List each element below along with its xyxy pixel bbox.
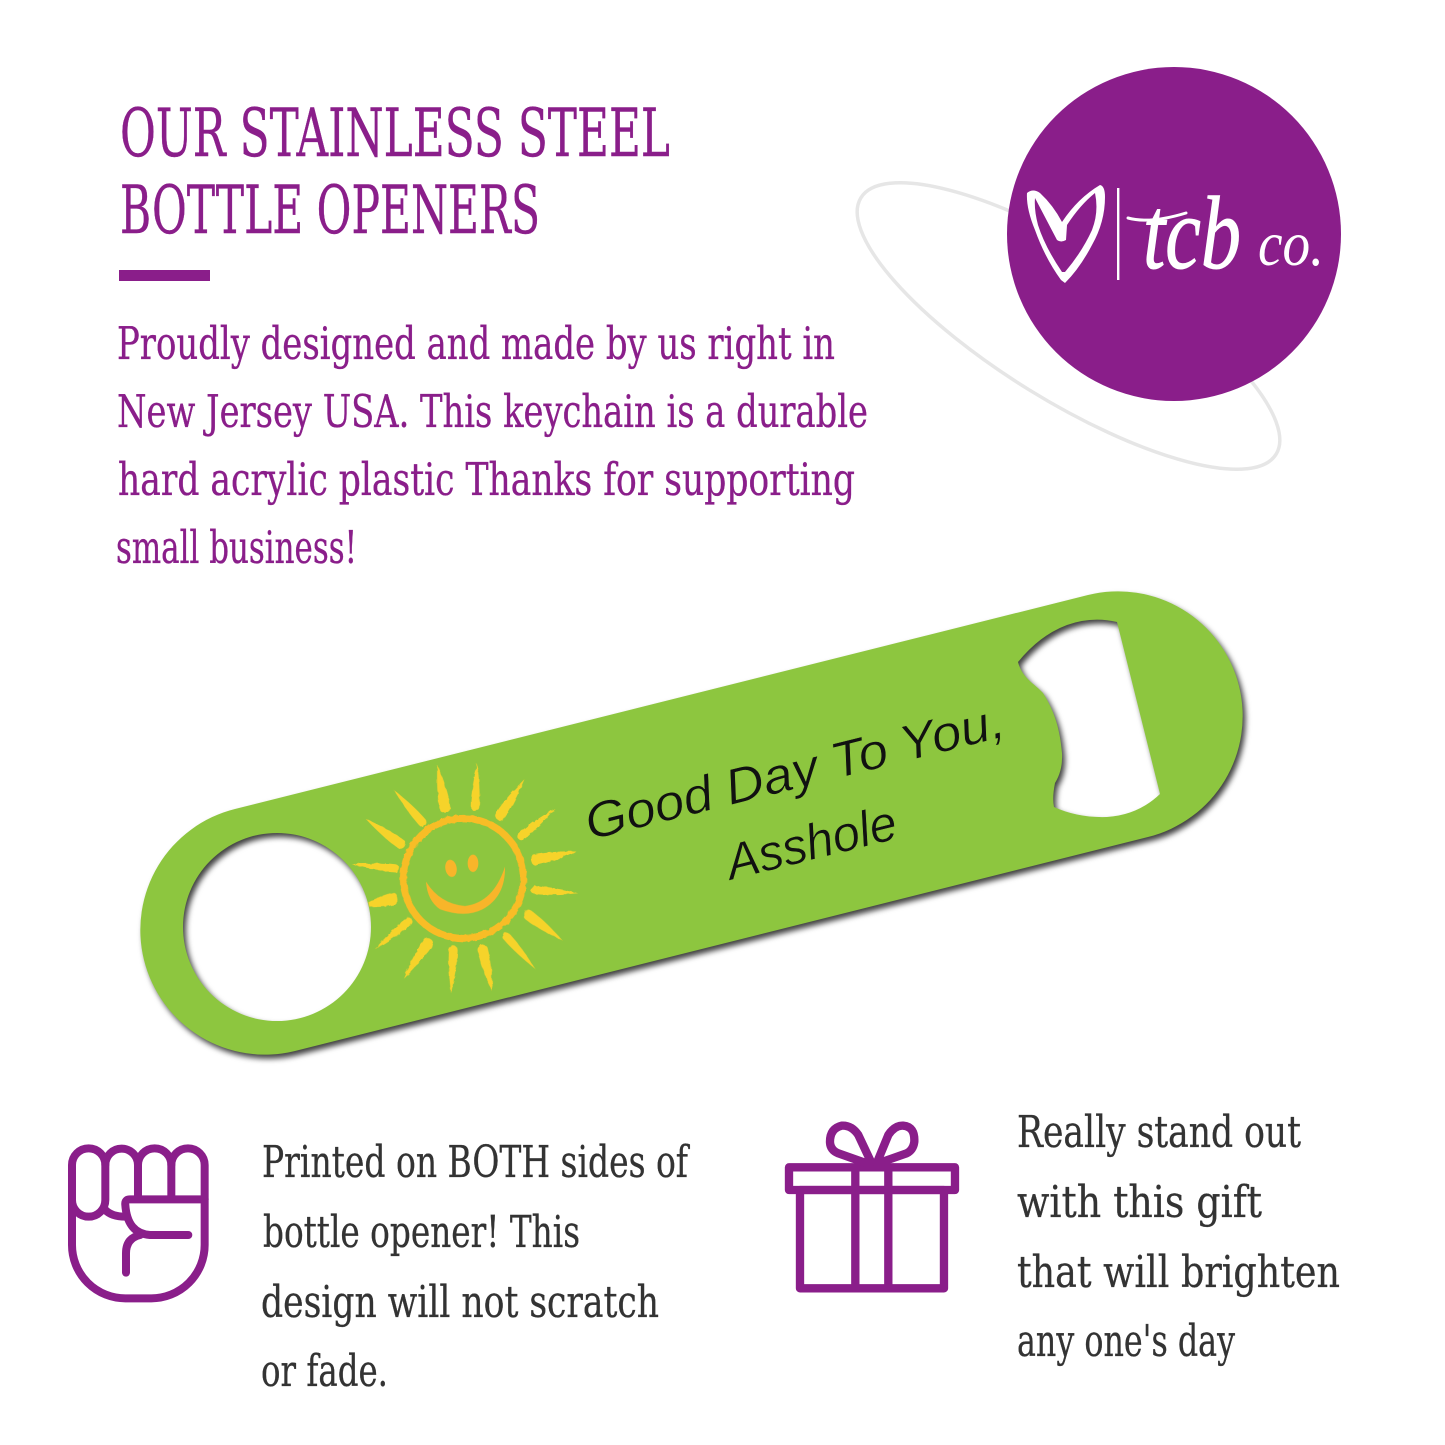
text: printed on both sides: Printed on BOTH sides of — [262, 1137, 690, 1188]
text: printed on both sides: bottle opener! This — [263, 1207, 580, 1258]
heading underline bar — [119, 270, 210, 281]
text: printed on both sides — [261, 1137, 690, 1397]
bottle opener — [140, 591, 1243, 1055]
decorative orbit ellipse — [821, 134, 1316, 518]
intro text block: Proudly designed and made by us right in — [117, 317, 835, 370]
text: printed on both sides: or fade. — [261, 1346, 388, 1397]
icon: fist — [72, 1148, 205, 1298]
icon: gift — [789, 1126, 955, 1288]
text: stand out: Really stand out — [1017, 1107, 1301, 1158]
heading: BOTTLE OPENERS — [120, 172, 540, 249]
icon: smiling sun — [351, 763, 578, 993]
intro text block: small business! — [116, 521, 357, 574]
heading — [120, 95, 670, 249]
intro text block — [116, 317, 868, 574]
icon: heart — [1027, 185, 1105, 283]
text: printed on both sides: design will not scratch — [261, 1277, 659, 1328]
opener text: Good Day To You, — [579, 692, 1010, 851]
logo badge: tcb co.: co. — [1258, 208, 1324, 279]
intro text block: hard acrylic plastic Thanks for supporting — [118, 453, 855, 506]
intro text block: New Jersey USA. This keychain is a durable — [117, 385, 868, 438]
text: stand out: that will brighten — [1017, 1247, 1340, 1298]
logo badge: tcb co.: tcb — [1143, 176, 1241, 291]
text: stand out: any one's day — [1017, 1316, 1235, 1367]
t crossbar swash — [1128, 213, 1186, 220]
opener body — [140, 591, 1243, 1055]
heading: OUR STAINLESS STEEL — [120, 95, 670, 172]
text: stand out — [1017, 1107, 1340, 1367]
opener text: Asshole — [717, 794, 902, 891]
logo badge: tcb co. — [1007, 67, 1341, 401]
text: stand out: with this gift — [1017, 1177, 1262, 1228]
